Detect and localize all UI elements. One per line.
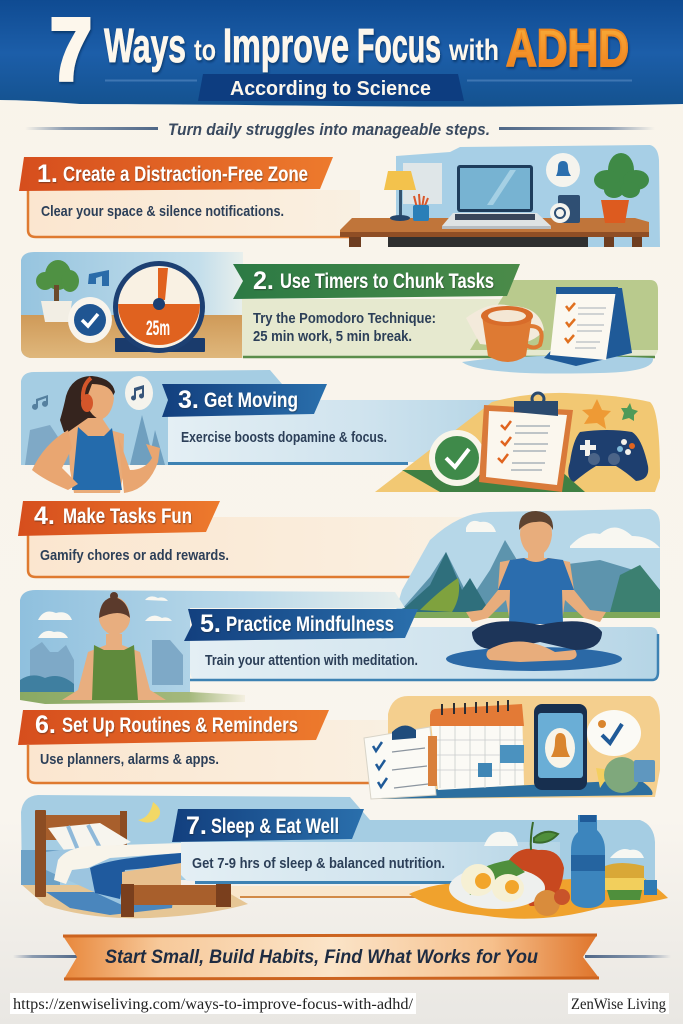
icon: checklist calendar	[544, 287, 632, 366]
icon: clouds	[484, 832, 644, 858]
panel 6: routines	[18, 696, 660, 799]
icon: potted plant	[594, 153, 649, 223]
icon: blue puddle	[462, 356, 653, 374]
icon: laptop	[442, 165, 551, 229]
heading ribbon 3	[162, 384, 327, 417]
title: 7	[50, 0, 92, 99]
heading ribbon 6: 6.	[35, 711, 56, 739]
subtitle ribbon: According to Science	[230, 78, 431, 100]
body text 2: 25 min work, 5 min break.	[253, 328, 412, 345]
body text 2: Try the Pomodoro Technique:	[253, 310, 436, 327]
tagline	[25, 120, 655, 139]
subtitle ribbon	[105, 74, 632, 101]
heading ribbon 1: Create a Distraction-Free Zone	[63, 163, 308, 186]
body text 7: Get 7-9 hrs of sleep & balanced nutrition.	[192, 855, 445, 872]
card 6	[27, 720, 400, 784]
panel 2: timers	[21, 252, 658, 374]
icon: music note	[88, 270, 109, 286]
heading ribbon 6	[18, 710, 329, 745]
icon: check circle	[429, 430, 485, 486]
bed	[35, 810, 231, 917]
desk	[340, 218, 649, 247]
heading ribbon 7: Sleep & Eat Well	[211, 815, 339, 838]
icon: water bottle	[571, 815, 605, 908]
icon: apple	[509, 822, 564, 906]
icon: food containers	[605, 863, 657, 900]
body text 4: Gamify chores or add rewards.	[40, 547, 229, 564]
heading ribbon 4	[18, 501, 220, 536]
footer url: https://zenwiseliving.com/ways-to-improve-focus-with-adhd/	[13, 996, 414, 1013]
heading ribbon 6: Set Up Routines & Reminders	[62, 714, 298, 737]
illustration: desk scene	[340, 145, 660, 247]
card 4	[27, 517, 470, 578]
title: to	[194, 34, 216, 67]
heading ribbon 2	[233, 264, 520, 299]
scene background	[21, 252, 243, 358]
clock	[113, 261, 205, 353]
heading ribbon 7	[172, 809, 364, 842]
icon: clipboard	[364, 725, 436, 799]
icon: music notes	[32, 376, 153, 410]
card 1	[27, 190, 360, 238]
panel 4: make tasks fun	[18, 501, 660, 618]
panel 3: get moving	[21, 370, 660, 493]
card 7	[181, 842, 560, 884]
card 3	[168, 400, 500, 465]
clock: 25m	[146, 317, 170, 340]
heading ribbon 5	[184, 609, 418, 641]
icon: stars	[582, 399, 638, 429]
icon: plant	[36, 260, 79, 322]
icon: wall calendar	[428, 700, 524, 790]
icon: check speech bubble	[587, 710, 641, 756]
woman exercising	[32, 376, 160, 493]
card 5	[190, 627, 658, 680]
heading ribbon 3: 3.	[178, 386, 199, 414]
illustration: mountain scene	[394, 509, 660, 618]
icon: pencil cup	[413, 194, 429, 221]
person meditating	[446, 511, 622, 671]
title: Improve	[223, 20, 349, 73]
body text 6: Use planners, alarms & apps.	[40, 751, 219, 768]
heading ribbon 4: 4.	[34, 502, 55, 530]
panel 5: mindfulness	[20, 511, 658, 704]
body text 2	[253, 310, 436, 345]
body text 1: Clear your space & silence notifications.	[41, 203, 284, 220]
illustration: yellow backdrop	[375, 393, 660, 492]
orange table blob	[409, 875, 668, 919]
heading ribbon 2: 2.	[253, 267, 274, 295]
tagline: Turn daily struggles into manageable steps.	[168, 120, 490, 139]
green hill	[402, 470, 585, 492]
icon: bell	[546, 153, 580, 187]
title: Focus	[357, 20, 441, 73]
footer brand: ZenWise Living	[571, 996, 666, 1013]
call-to-action banner: Start Small, Build Habits, Find What Works for You	[105, 946, 538, 968]
title	[50, 0, 629, 99]
heading ribbon 1: 1.	[37, 160, 58, 188]
call-to-action banner	[13, 935, 671, 979]
illustration: backdrop	[372, 696, 660, 799]
icon: plate of eggs	[449, 860, 545, 909]
heading ribbon 4: Make Tasks Fun	[63, 505, 192, 528]
header banner	[0, 0, 683, 107]
icon: coffee cup	[466, 304, 544, 362]
heading ribbon 7: 7.	[186, 812, 207, 840]
panel 1: distraction-free zone	[19, 145, 660, 247]
heading ribbon 1	[19, 157, 333, 191]
scene background	[20, 590, 405, 704]
scene background	[21, 370, 282, 465]
heading ribbon 5: Practice Mindfulness	[226, 613, 394, 636]
icon: lamp	[384, 171, 416, 221]
icon: check badge	[68, 297, 112, 343]
body text 3: Exercise boosts dopamine & focus.	[181, 429, 387, 446]
icon: fruit	[534, 889, 570, 916]
heading ribbon 5: 5.	[200, 610, 221, 638]
card 2	[242, 280, 658, 358]
body text 5: Train your attention with meditation.	[205, 652, 418, 669]
icon: phone	[534, 704, 587, 790]
icon: power tablet	[550, 195, 580, 223]
heading ribbon 3: Get Moving	[204, 389, 298, 412]
title: with	[448, 34, 499, 67]
icon: clipboard	[479, 393, 573, 492]
icon: game controller	[568, 430, 648, 482]
icon: health items	[596, 757, 655, 793]
heading ribbon 2: Use Timers to Chunk Tasks	[280, 270, 494, 293]
panel 7: sleep and eat	[21, 795, 668, 919]
woman meditating	[62, 592, 166, 700]
title: ADHD	[506, 19, 629, 78]
icon: crescent moon	[138, 802, 160, 823]
scene background	[21, 795, 655, 918]
title: Ways	[104, 20, 186, 73]
